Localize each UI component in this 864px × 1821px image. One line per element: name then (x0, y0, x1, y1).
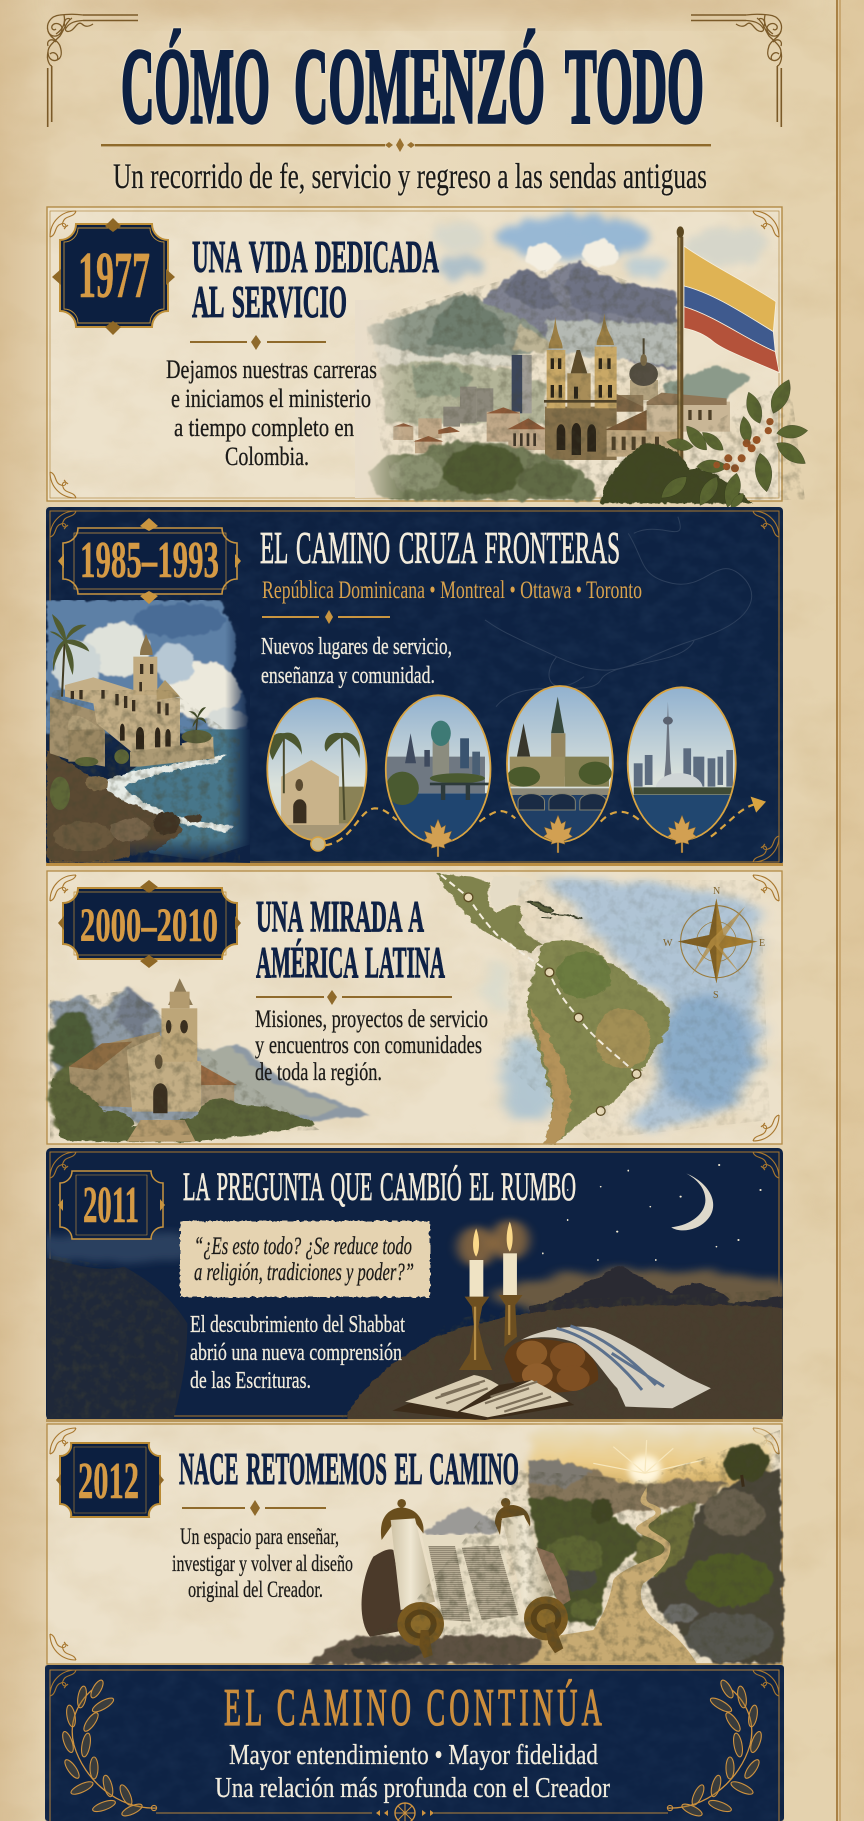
medallion: Santo Domingo (265, 697, 369, 843)
text block 1985 (261, 634, 452, 689)
text block 1977: Colombia. (225, 442, 309, 471)
medallion: Ottawa (504, 683, 617, 847)
challah bread (504, 1339, 598, 1392)
text block 2011 (190, 1312, 405, 1394)
text block 1977: Dejamos nuestras carreras (166, 355, 377, 384)
Torah scroll (381, 1498, 568, 1658)
coffee plant (660, 378, 809, 511)
heading 2000: UNA MIRADA A (256, 892, 424, 941)
text block 1977: e iniciamos el ministerio (171, 384, 371, 413)
text block 2012: original del Creador. (188, 1577, 323, 1602)
icons: maple leaves (424, 815, 696, 857)
text block 1977: a tiempo completo en (174, 413, 354, 442)
panel: 1977 (47, 207, 810, 511)
badge: 2000-2010: 2000–2010 (80, 899, 218, 952)
badge: 2012: 2012 (78, 1453, 139, 1510)
panel: 2012 (47, 1424, 783, 1664)
medallion: Toronto (625, 685, 738, 842)
divider (190, 335, 326, 350)
text block conclusion: Mayor entendimiento • Mayor fidelidad (229, 1739, 598, 1771)
illustration: Dominican coast (47, 600, 253, 863)
badge: 1985-1993: 1985–1993 (80, 532, 219, 589)
dashed route with arrow (311, 797, 766, 851)
panel background 2011 (46, 1148, 783, 1422)
compass letters: S (713, 990, 719, 1001)
text block 2012: investigar y volver al diseño (172, 1551, 353, 1576)
panel background 2000 (47, 871, 782, 1144)
panel: 2011 (28, 1148, 805, 1427)
church scene (50, 986, 369, 1135)
heading 1977: AL SERVICIO (192, 276, 347, 327)
painted texture on church and map (50, 880, 770, 1140)
quote callout: a religión, tradiciones y poder?” (194, 1259, 414, 1286)
header divider (101, 138, 711, 152)
illustration: map of Latin America (50, 873, 761, 1145)
icon: left laurel (60, 1678, 157, 1818)
painted texture on landscape (360, 260, 810, 502)
heading 1977 (192, 231, 439, 327)
text block 1985: Nuevos lugares de servicio, (261, 634, 452, 660)
winding path (497, 1487, 697, 1663)
text block 2000: de toda la región. (255, 1059, 382, 1086)
foliage (370, 442, 597, 500)
panel: conclusion (45, 1665, 784, 1821)
text block 2012 (172, 1524, 353, 1602)
text block 2000: y encuentros con comunidades (255, 1032, 482, 1059)
badge: 1977: 1977 (78, 239, 150, 312)
ornamental corners of header (47, 14, 782, 127)
medallion: Montreal (383, 693, 493, 847)
panel background 2012 (47, 1424, 782, 1664)
badge: 2011 (58, 1171, 165, 1239)
badge: 2000-2010 (58, 880, 241, 968)
painted texture on terrain (50, 1255, 782, 1418)
quote callout (180, 1221, 430, 1297)
text block conclusion: Una relación más profunda con el Creador (215, 1772, 610, 1804)
badge: 1977 (52, 218, 175, 335)
painted texture on coast (47, 690, 242, 862)
quote callout: “¿Es esto todo? ¿Se reduce todo (194, 1233, 412, 1260)
city medallions (265, 683, 766, 851)
compass letters: N (713, 886, 720, 897)
palms (50, 614, 212, 743)
text block conclusion (215, 1739, 610, 1804)
text block 2011: El descubrimiento del Shabbat (190, 1312, 405, 1338)
heading 1977: UNA VIDA DEDICADA (192, 231, 439, 282)
painted texture on scene (310, 1430, 780, 1662)
flag (684, 246, 779, 373)
candles (457, 1220, 529, 1370)
compass rose (678, 898, 758, 983)
open book (392, 1375, 574, 1420)
shrubs under the flag (600, 443, 753, 503)
rocks behind scroll (362, 1549, 407, 1637)
panel: 1985-1993 (46, 507, 783, 866)
title: COMENZÓ (294, 28, 545, 146)
illustration: map cracks (485, 517, 752, 707)
compass letters (663, 886, 765, 1001)
title: CÓMO (121, 28, 270, 146)
tallit (521, 1326, 711, 1408)
icon: right laurel (667, 1678, 764, 1818)
shrubs on the wall (50, 749, 129, 810)
divider (182, 1500, 326, 1516)
panel: 2000-2010 (47, 871, 782, 1145)
divider (262, 610, 390, 624)
illustration: Colombian city, mountains and flag (367, 215, 809, 511)
compass letters: E (759, 938, 765, 949)
text block 2011: de las Escrituras. (190, 1368, 311, 1394)
badge: 2012 (56, 1443, 164, 1517)
text block 2000 (255, 1006, 488, 1086)
badge: 1985-1993 (58, 518, 241, 604)
badge: 2011: 2011 (83, 1177, 139, 1234)
divider (256, 990, 452, 1005)
flag pole (677, 237, 683, 467)
text block 2011: abrió una nueva comprensión (190, 1340, 402, 1366)
text block 2012: Un espacio para enseñar, (180, 1524, 339, 1549)
illustration: night landscape (28, 1164, 805, 1427)
text block 1977 (166, 355, 377, 471)
illustration: path and sunrise (307, 1430, 783, 1664)
mist fading the landscape into the parchment (355, 300, 405, 498)
bottom ornament (156, 1803, 668, 1821)
cathedral (544, 313, 730, 460)
places list: República Dominicana • Montreal • Ottawa • Toronto (262, 577, 642, 604)
fort (50, 633, 215, 767)
text block 2000: Misiones, proyectos de servicio (255, 1006, 488, 1033)
panel background 1977 (47, 207, 782, 501)
crescent moon (671, 1173, 713, 1230)
still life: candles, bread, tallit and book (392, 1220, 711, 1420)
title (121, 28, 704, 146)
panel background conclusion (45, 1665, 784, 1821)
compass letters: W (663, 938, 673, 949)
heading 2000 (256, 892, 445, 987)
panel background 1985 (46, 507, 783, 866)
text block 1985: enseñanza y comunidad. (261, 663, 435, 689)
panel: 2000-2010: AMÉRICA LATINA (256, 938, 445, 987)
